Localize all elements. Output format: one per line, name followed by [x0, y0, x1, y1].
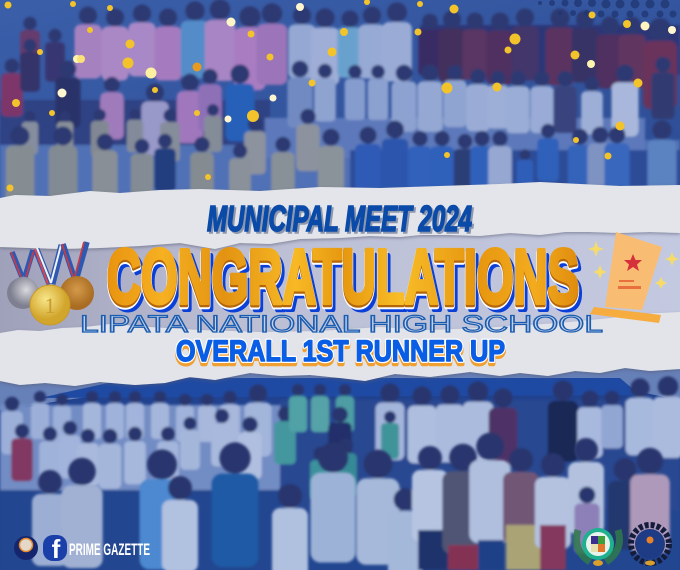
heading: Municipal Meet 2024: MUNICIPAL MEET 2024	[207, 198, 472, 239]
icon: facebook: f	[52, 534, 61, 564]
torn paper: upper	[0, 182, 680, 249]
heading: Municipal Meet 2024: MUNICIPAL MEET 2024	[209, 200, 474, 241]
icon: organisation logo	[14, 536, 38, 560]
medals: 1	[44, 293, 56, 318]
school name: LIPATA NATIONAL HIGH SCHOOL	[80, 311, 603, 338]
halftone dots top right	[538, 0, 676, 18]
footer brand: Prime Gazette: PRIME GAZETTE	[69, 541, 150, 559]
footer brand: Prime Gazette	[14, 534, 150, 564]
school seal: green	[576, 528, 620, 566]
bottom team photo	[0, 365, 680, 570]
sparkles	[588, 241, 679, 289]
award: Overall 1st Runner Up: OVERALL 1ST RUNNER UP	[176, 335, 505, 368]
trophy	[588, 232, 679, 323]
heading: Municipal Meet 2024	[207, 198, 474, 241]
school seal: dark	[631, 525, 669, 566]
torn paper: lower	[0, 312, 680, 386]
award: Overall 1st Runner Up: OVERALL 1ST RUNNER UP	[176, 335, 505, 368]
top team photo	[0, 0, 680, 215]
gold confetti	[4, 0, 676, 192]
lavender band behind headline	[0, 225, 680, 335]
medals	[7, 242, 94, 325]
award: Overall 1st Runner Up: OVERALL 1ST RUNNER UP	[176, 338, 505, 371]
